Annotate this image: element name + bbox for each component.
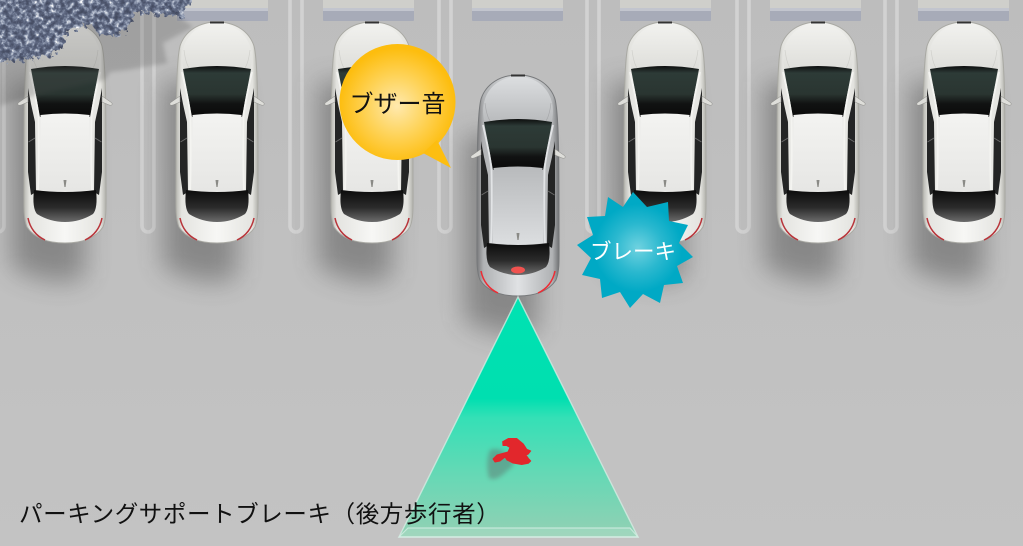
tree canopy [0,0,194,64]
tree shadow [0,10,193,106]
car: parked 5 [771,22,865,243]
car: parked 6 [917,22,1011,243]
starburst: brake: ブレーキ [590,240,676,264]
car: parked 1 [18,22,112,243]
detection zone triangle [399,297,638,537]
speech bubble: buzzer sound [340,44,456,168]
caption: パーキングサポートブレーキ（後方歩行者） [19,501,500,527]
car: parked 3 [325,22,419,243]
parking space lines [0,0,897,232]
car: parked 2 [170,22,264,243]
starburst: brake [577,192,693,308]
brake light glow [511,266,525,274]
wheel stops [177,0,1009,21]
pedestrian [487,438,531,479]
speech bubble: buzzer sound: ブザー音 [350,91,446,118]
parked white cars [18,22,1011,243]
car shadows [11,82,984,335]
reversing silver car [471,74,565,296]
car: parked 4 [618,22,712,243]
